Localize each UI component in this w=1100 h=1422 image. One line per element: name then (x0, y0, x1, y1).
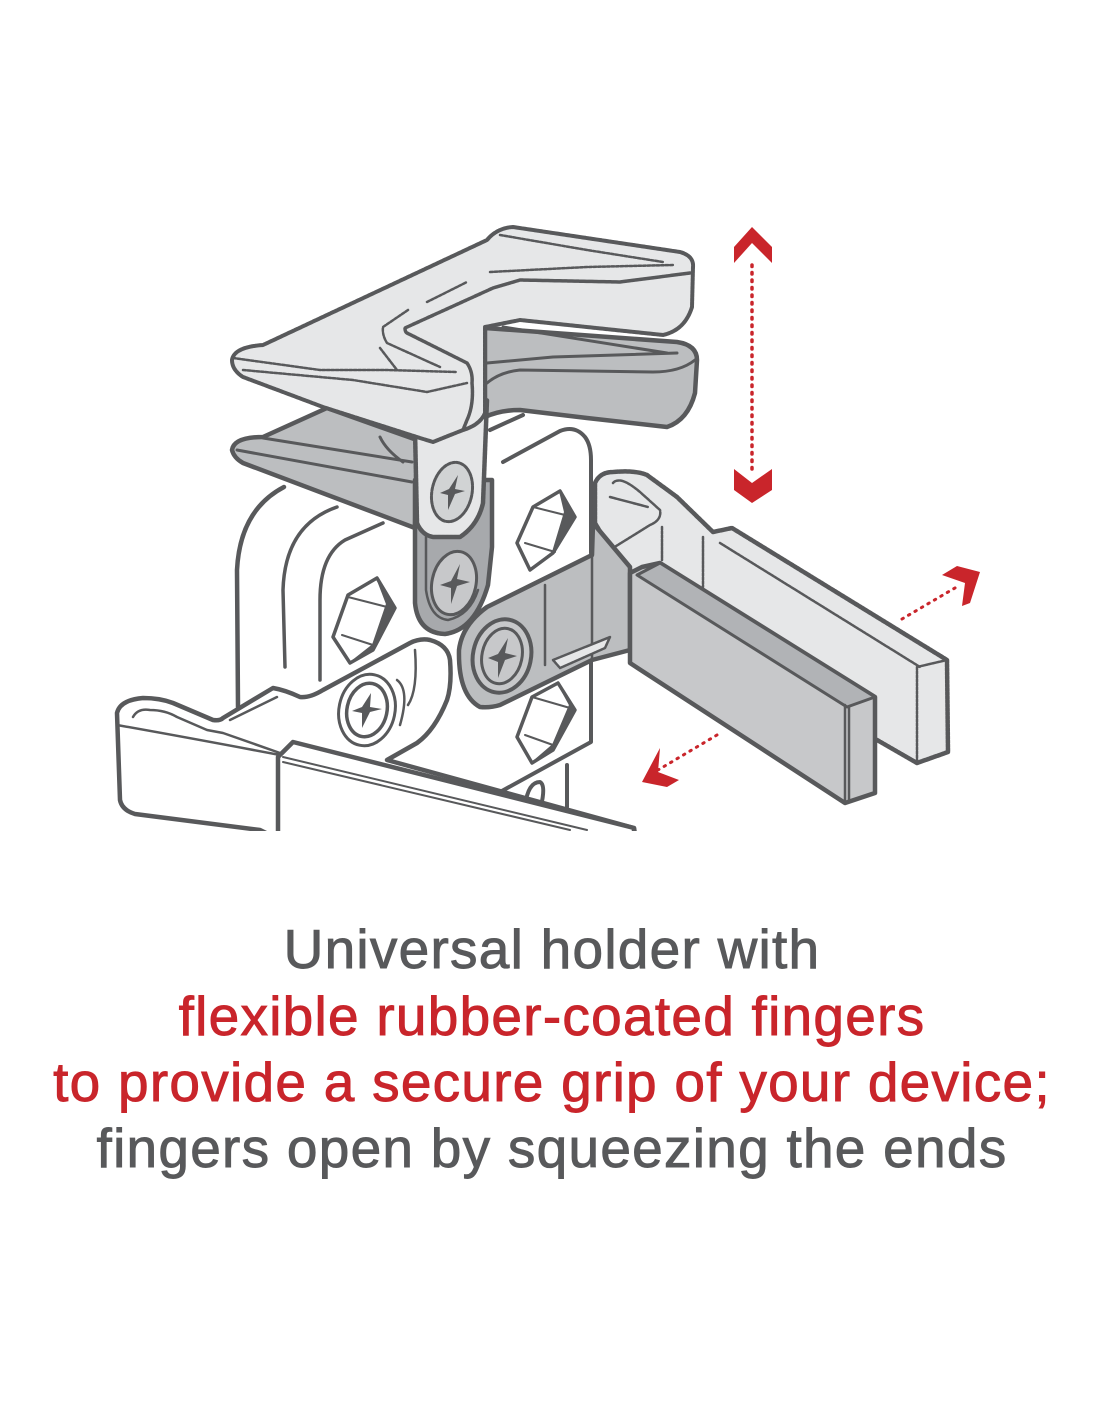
upper rear finger (485, 327, 697, 427)
caption text: Universal holder with (284, 918, 820, 980)
right front finger (630, 563, 875, 803)
caption text: flexible rubber-coated fingers (179, 985, 925, 1047)
arrow: vertical red double-headed (734, 227, 772, 503)
lower left clip (117, 639, 636, 850)
illustration: universal holder mechanism (117, 227, 948, 850)
right rear finger (595, 471, 948, 763)
caption text: fingers open by squeezing the ends (97, 1117, 1007, 1179)
top front finger (232, 227, 693, 442)
caption text (53, 918, 1051, 1179)
base plate (237, 415, 591, 807)
arrow: right finger outward (902, 566, 980, 619)
centre upper clip (415, 400, 487, 537)
right clip arm (459, 523, 630, 707)
caption text: to provide a secure grip of your device; (53, 1051, 1051, 1113)
left rear finger (232, 408, 417, 528)
centre lower clip arm (415, 480, 492, 634)
arrow: right finger inward (642, 735, 717, 787)
hex bolts (333, 491, 575, 763)
